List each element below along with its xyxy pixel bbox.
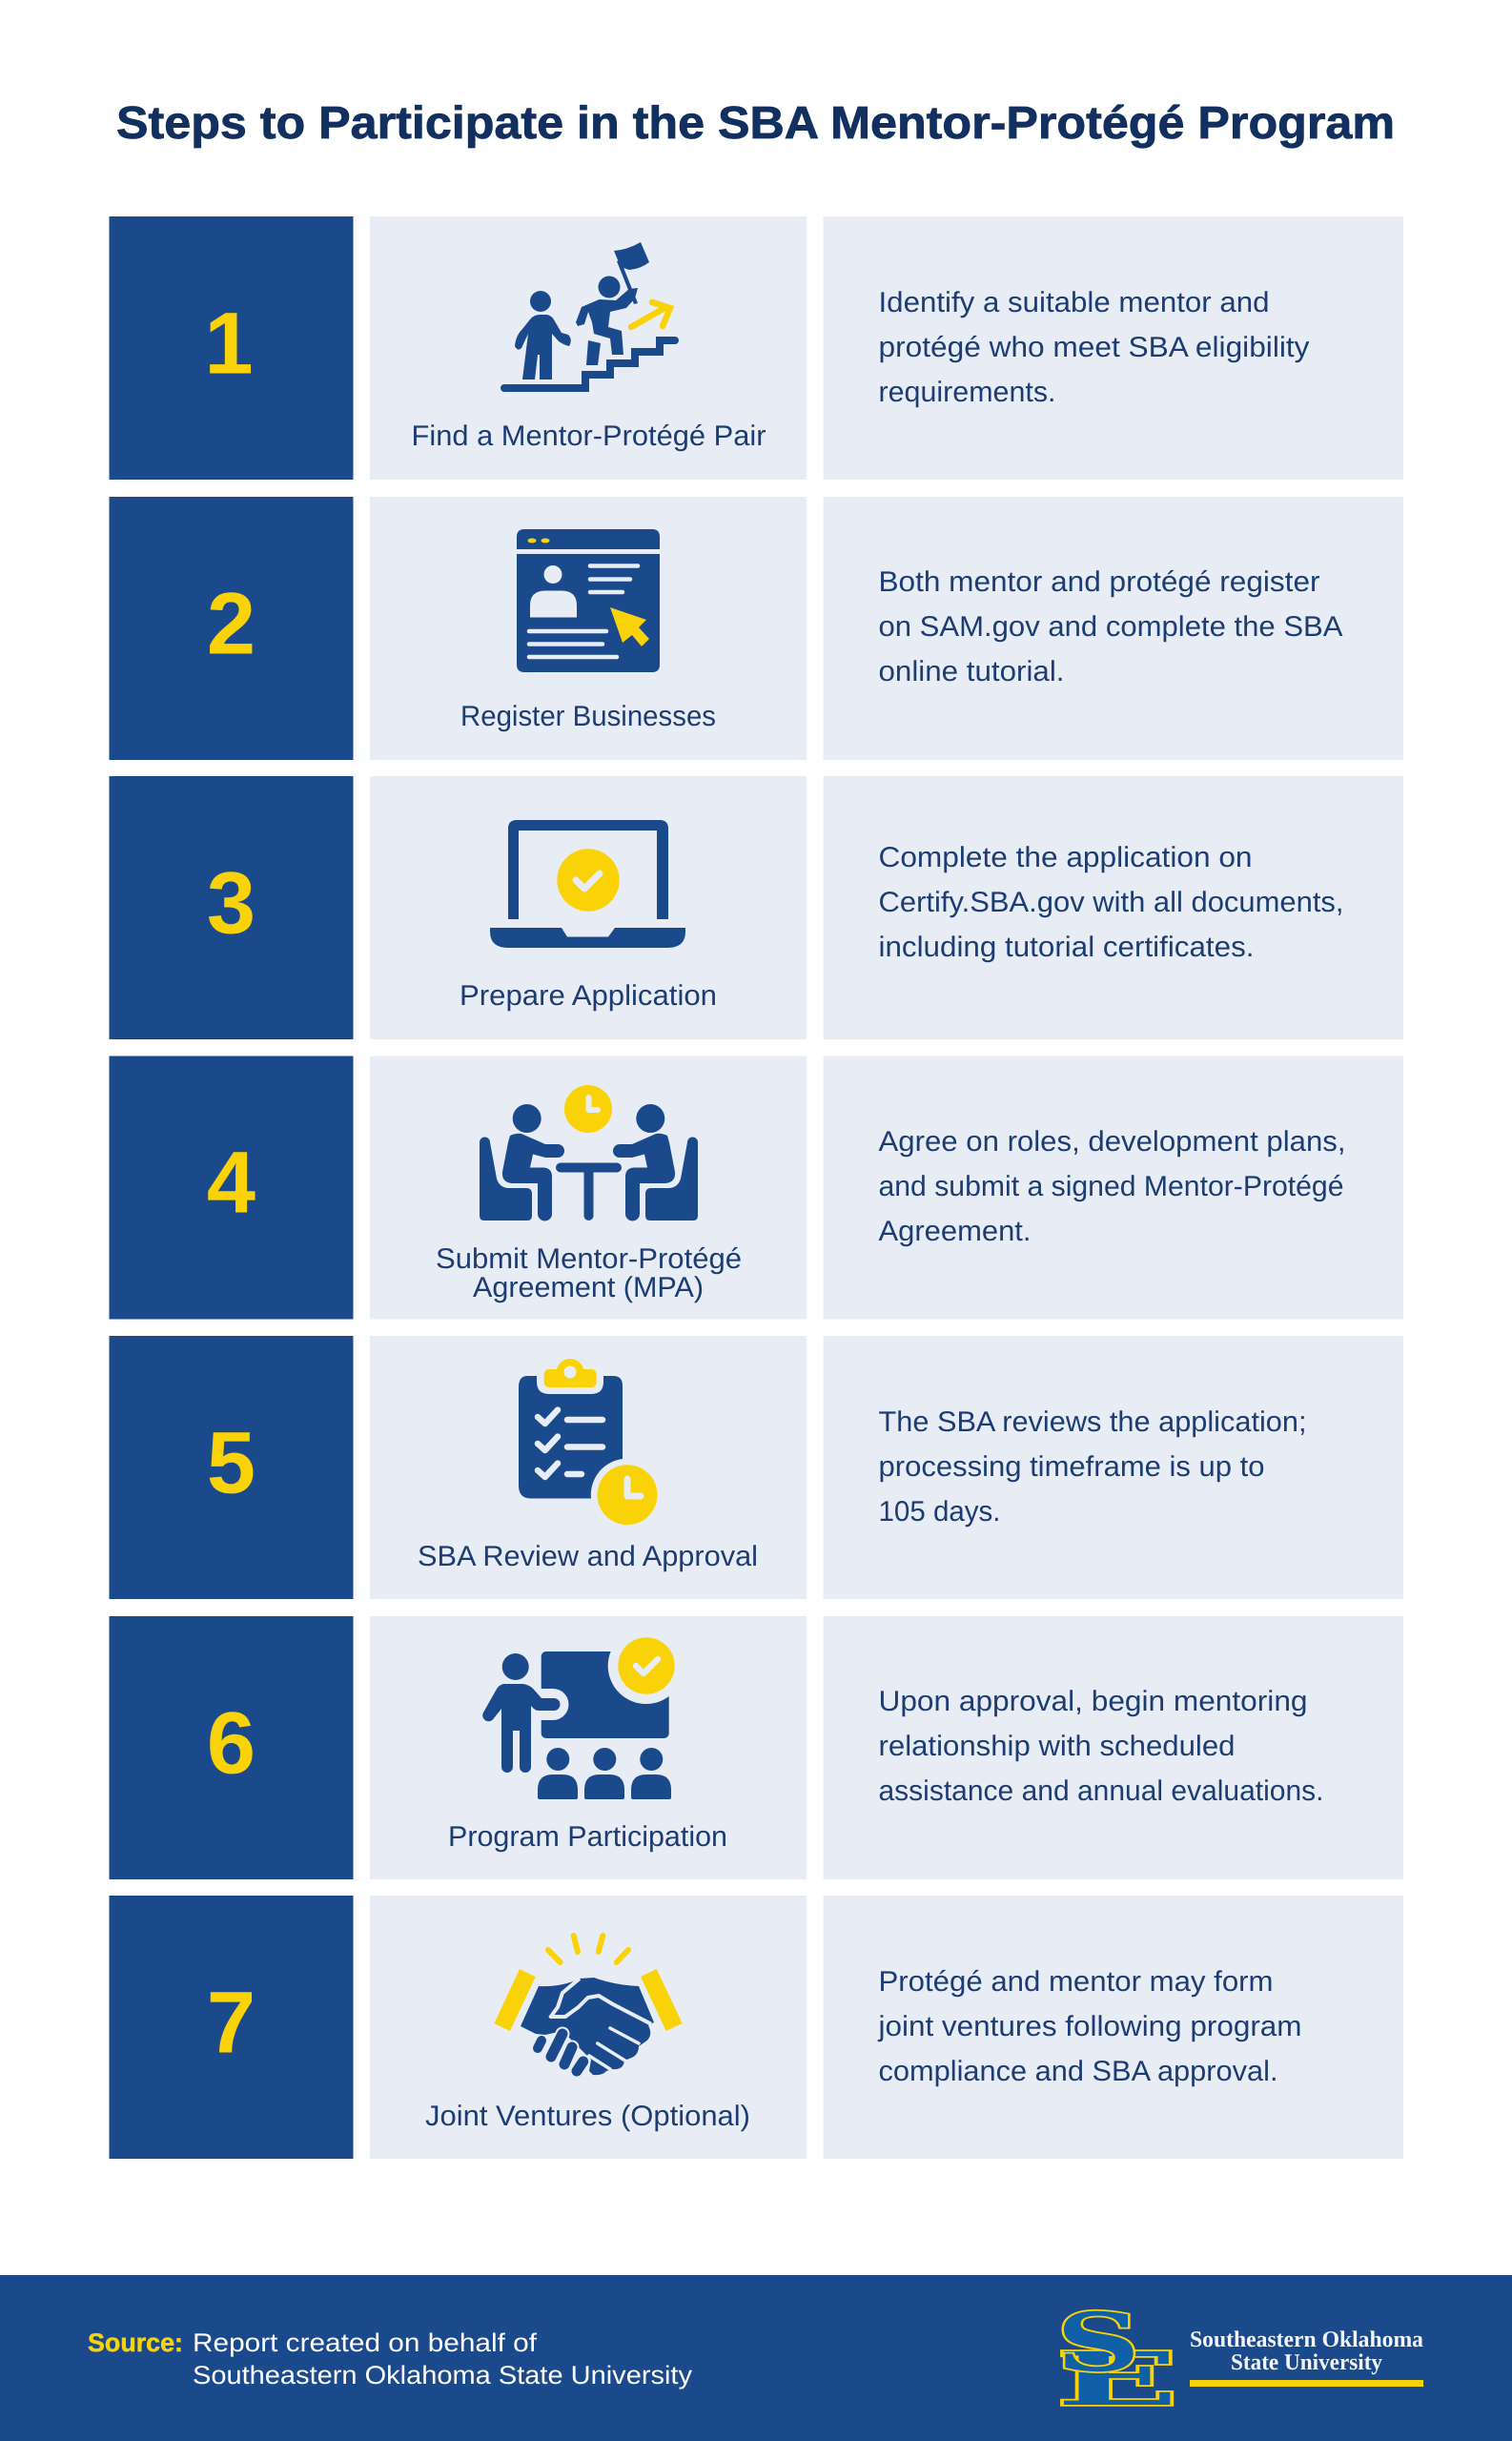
university logo — [1056, 2295, 1423, 2423]
step 7 label: Joint Ventures (Optional) — [425, 2101, 750, 2132]
step 6 description: relationship with scheduled — [879, 1731, 1236, 1762]
step 6 icon panel — [370, 1616, 807, 1879]
logo wordmark — [1190, 2328, 1423, 2375]
step 6 description — [824, 1616, 1403, 1879]
step 4 description — [824, 1056, 1403, 1320]
step 3 description: including tutorial certificates. — [879, 932, 1255, 963]
step 1 description: protégé who meet SBA eligibility — [879, 332, 1310, 363]
step 2 number: 2 — [207, 576, 255, 673]
source note: Report created on behalf of — [193, 2328, 538, 2357]
step 6 label: Program Participation — [448, 1821, 727, 1853]
step 7 number — [109, 1896, 353, 2159]
step 5 number — [109, 1336, 353, 1599]
step 3 icon panel — [370, 776, 807, 1039]
step 5 description: processing timeframe is up to — [879, 1451, 1264, 1483]
step 1 number: 1 — [204, 296, 254, 393]
source note — [88, 2328, 693, 2390]
icon: clipboard checklist with clock — [519, 1359, 658, 1525]
title: Steps to Participate in the SBA Mentor-Protégé Program — [116, 98, 1395, 149]
step 1 description — [824, 216, 1403, 480]
step 2 description: Both mentor and protégé register — [879, 566, 1320, 598]
icon: registration web page — [517, 529, 660, 672]
step 1 description: requirements. — [879, 377, 1056, 408]
step 7 number: 7 — [207, 1974, 255, 2071]
step 5 number: 5 — [207, 1415, 255, 1512]
source note: Southeastern Oklahoma State University — [193, 2361, 693, 2390]
icon: laptop with check — [490, 820, 685, 948]
step 2 row — [109, 497, 1403, 760]
step 4 label — [436, 1243, 742, 1303]
step 4 description: Agreement. — [879, 1216, 1032, 1247]
step 2 description: online tutorial. — [879, 656, 1064, 687]
step 5 description: 105 days. — [879, 1496, 1001, 1528]
step 1 icon panel — [370, 216, 807, 480]
step 4 label: Submit Mentor-Protégé — [436, 1243, 742, 1275]
step 4 number: 4 — [207, 1135, 255, 1232]
step 7 icon panel — [370, 1896, 807, 2159]
step 3 label: Prepare Application — [460, 980, 717, 1012]
step 3 number — [109, 776, 353, 1039]
step 3 number: 3 — [207, 854, 255, 952]
step 4 number — [109, 1056, 353, 1320]
step 4 description: Agree on roles, development plans, — [879, 1126, 1346, 1158]
logo monogram SE: E — [1056, 2337, 1178, 2423]
logo wordmark: Southeastern Oklahoma — [1190, 2328, 1423, 2352]
step 2 description: on SAM.gov and complete the SBA — [879, 611, 1342, 643]
step 2 icon panel — [370, 497, 807, 760]
step 4 row — [109, 1056, 1403, 1320]
step 1 number — [109, 216, 353, 480]
logo monogram SE: S — [1056, 2295, 1140, 2390]
step 1 label: Find a Mentor-Protégé Pair — [412, 421, 766, 452]
footer band — [0, 2275, 1512, 2441]
source note: Source: — [88, 2328, 183, 2357]
step 2 label: Register Businesses — [460, 701, 716, 732]
step 7 description: Protégé and mentor may form — [879, 1966, 1274, 1998]
step 1 description: Identify a suitable mentor and — [879, 287, 1270, 318]
step 4 description: and submit a signed Mentor-Protégé — [879, 1171, 1344, 1202]
step 7 description: joint ventures following program — [877, 2011, 1302, 2042]
step 1 row — [109, 216, 1403, 480]
icon: two people meeting at a table — [480, 1085, 698, 1220]
step 5 row — [109, 1336, 1403, 1599]
step 6 description: assistance and annual evaluations. — [879, 1775, 1323, 1807]
icon: presenter with board and audience — [482, 1628, 684, 1799]
step 4 icon panel — [370, 1056, 807, 1320]
icon: handshake — [494, 1936, 683, 2075]
step 7 description: compliance and SBA approval. — [879, 2056, 1277, 2087]
step 5 description — [824, 1336, 1403, 1599]
step 7 description — [824, 1896, 1403, 2159]
step 3 description — [824, 776, 1403, 1039]
step 5 icon panel — [370, 1336, 807, 1599]
step 5 label: SBA Review and Approval — [418, 1541, 758, 1572]
step 3 description: Certify.SBA.gov with all documents, — [879, 887, 1344, 918]
step 6 description: Upon approval, begin mentoring — [879, 1686, 1308, 1717]
step 7 row — [109, 1896, 1403, 2159]
logo wordmark: State University — [1231, 2350, 1382, 2375]
step 5 description: The SBA reviews the application; — [879, 1406, 1306, 1438]
logo monogram SE — [1056, 2295, 1178, 2423]
icon: mentor and protege climbing stairs — [504, 242, 675, 388]
step 3 row — [109, 776, 1403, 1039]
step 2 description — [824, 497, 1403, 760]
step 6 number — [109, 1616, 353, 1879]
step 3 description: Complete the application on — [879, 842, 1253, 873]
step 6 row — [109, 1616, 1403, 1879]
step 4 label: Agreement (MPA) — [473, 1272, 704, 1303]
step 2 number — [109, 497, 353, 760]
step 6 number: 6 — [207, 1695, 255, 1793]
